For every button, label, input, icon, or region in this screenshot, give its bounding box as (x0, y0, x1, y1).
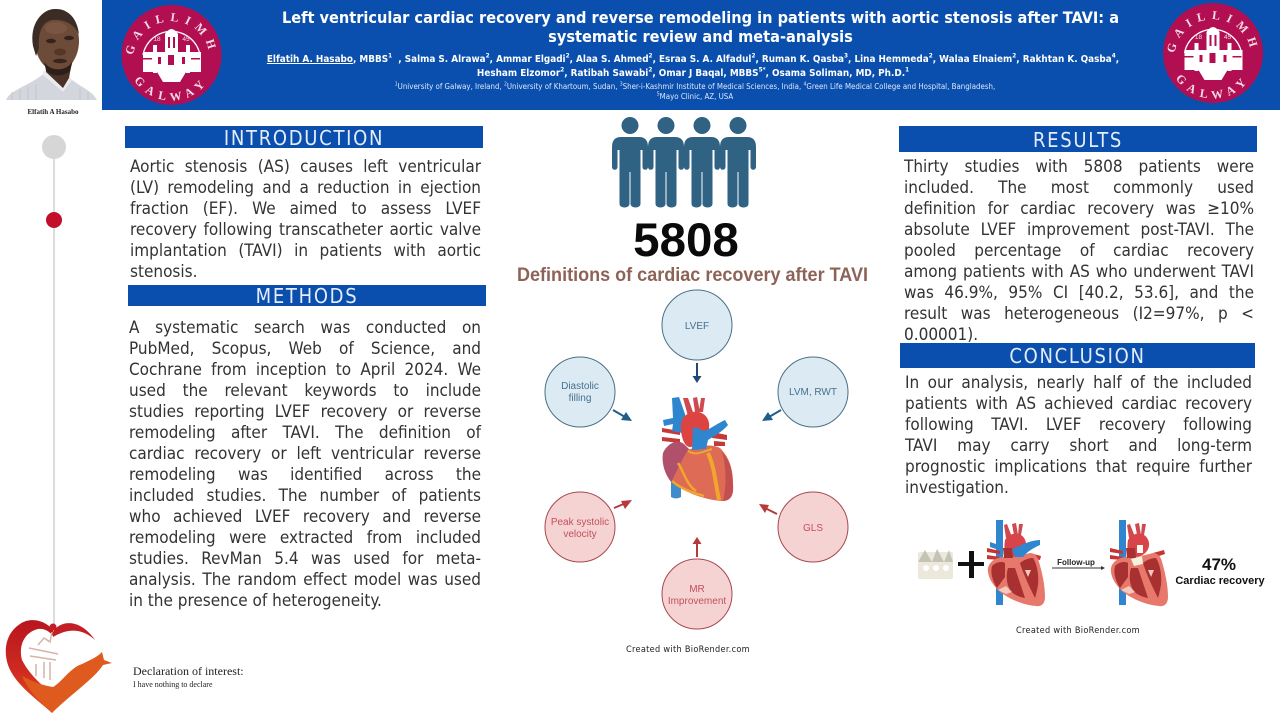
text: methods: remodeling was identified across the (129, 465, 481, 485)
text: methods: in the presence of heterogeneity. (129, 591, 382, 611)
result: 47% cardiac recovery: Cardiac recovery (1175, 575, 1266, 587)
university logo left: 18 (153, 36, 161, 43)
heading: methods (128, 285, 486, 306)
text: results (904, 157, 1254, 345)
circle: peak systolic velocity: velocity (563, 529, 597, 540)
text: introduction: (LV) remodeling and a reduction in ejection (130, 178, 481, 198)
university logo right: GALWAY (1177, 75, 1246, 99)
university logo right: 18 (1195, 34, 1202, 41)
university logo left (122, 5, 222, 105)
circle: GLS: GLS (803, 523, 823, 534)
circle: diastolic filling: Diastolic (561, 381, 599, 392)
text: results: was 46.9%, 95% CI [40.2, 53.6], and the (904, 283, 1254, 303)
text: methods: studies. RevMan 5.4 was used for meta- (129, 549, 481, 569)
patient count: 5808 (633, 214, 739, 267)
text: methods: cardiac recovery or left ventricular reverse (129, 444, 481, 464)
heading: introduction: INTRODUCTION (224, 126, 384, 150)
circle: diastolic filling (545, 357, 615, 427)
text: introduction (130, 157, 482, 282)
header band (102, 0, 1280, 110)
text: methods: Cochrane from inception to April 2024. We (129, 360, 481, 380)
circle: MR improvement: Improvement (668, 596, 726, 607)
icon: heart logo (6, 620, 112, 713)
circle: LVEF (662, 290, 732, 360)
title: Left ventricular cardiac recovery and reverse remodeling in patients with aortic stenosis after TAVI: a (282, 8, 1119, 27)
circle: LVM, RWT: LVM, RWT (789, 387, 837, 398)
definitions heading: Definitions of cardiac recovery after TAVI (517, 265, 868, 286)
text: conclusion: In our analysis, nearly half of the included (905, 373, 1252, 393)
university logo right (1163, 3, 1263, 103)
heading: conclusion (900, 343, 1255, 368)
text: conclusion: TAVI may carry short and long-term (905, 436, 1252, 456)
text: conclusion: patients with AS achieved cardiac recovery (905, 394, 1252, 414)
text: introduction: stenosis. (130, 262, 197, 282)
circle: GLS (778, 492, 848, 562)
text: methods: who achieved LVEF recovery and reverse (129, 507, 481, 527)
heading: methods: METHODS (256, 284, 358, 308)
text: introduction: implantation (TAVI) in patients with aortic (130, 241, 481, 261)
timeline (42, 135, 66, 625)
heading: results: RESULTS (1033, 128, 1123, 152)
icon: heart before TAVI (987, 520, 1045, 606)
text: introduction: fraction (EF). We aimed to assess LVEF (130, 199, 481, 219)
text: methods: remodeling were extracted from included (129, 528, 481, 548)
text: introduction: recovery following transcatheter aortic valve (130, 220, 481, 240)
text: results: included. The most commonly used (904, 178, 1254, 198)
authors: Elfatih A. Hasabo, MBBS1 , Salma S. Alrawa2, Ammar Elgadi2, Alaa S. Ahmed2, Esraa S. A. Alfadul2, Ruman K. Qasba3, Lina Hemmeda2, Walaa Elnaiem2, Rakhtan K. Qasba4, (267, 52, 1119, 65)
text: methods: analysis. The random effect model was used (129, 570, 481, 590)
heading: conclusion: CONCLUSION (1009, 344, 1146, 368)
text: conclusion: prognostic implications that require further (905, 457, 1252, 477)
text: results: absolute LVEF improvement post-TAVI. The (904, 220, 1254, 240)
heading: results (899, 126, 1257, 152)
declaration of interest: I have nothing to declare (133, 680, 213, 689)
arrow: follow-up (1052, 558, 1105, 570)
affiliations: 1University of Galway, Ireland, 2University of Khartoum, Sudan, 3Sher-i-Kashmir Institute of Medical Sciences, India, 4Green Life Medical College and Hospital, Bangladesh, (395, 81, 995, 91)
circle: LVEF: LVEF (685, 321, 709, 332)
title (282, 8, 1119, 46)
text: conclusion: investigation. (905, 478, 1009, 498)
circle: MR improvement (662, 559, 732, 629)
presenter photo (6, 9, 97, 100)
icon: heart after TAVI (1110, 520, 1168, 606)
circle: LVM, RWT (778, 357, 848, 427)
text: methods: studies reporting LVEF recovery or reverse (129, 402, 481, 422)
heading: introduction (125, 126, 483, 148)
text: results: Thirty studies with 5808 patients were (904, 157, 1254, 177)
university logo left: 45 (182, 36, 190, 43)
arrow: follow-up: Follow-up (1057, 558, 1095, 567)
text: results: definition for cardiac recovery was ≥10% (904, 199, 1254, 219)
icon: anatomical heart (662, 397, 733, 501)
circle: peak systolic velocity: Peak systolic (551, 517, 609, 528)
text: results: 0.00001). (904, 325, 978, 345)
photo caption: Elfatih A Hasabo (28, 108, 79, 116)
text: methods: A systematic search was conducted on (129, 318, 481, 338)
declaration of interest: Declaration of interest: (133, 664, 244, 678)
text: created with BioRender (centre): Created with BioRender.com (626, 645, 750, 655)
icon: four people (612, 117, 756, 208)
text: methods: PubMed, Scopus, Web of Science, and (129, 339, 481, 359)
university logo left: GAILLIMH (126, 13, 216, 54)
icon: plus sign (958, 551, 984, 578)
university logo right: GAILLIMH (1168, 11, 1258, 52)
text: results: among patients with AS who underwent TAVI (904, 262, 1254, 282)
result: 47% cardiac recovery (1175, 555, 1266, 587)
result: 47% cardiac recovery: 47% (1202, 555, 1236, 574)
circle: diastolic filling: filling (569, 393, 591, 404)
circle: MR improvement: MR (689, 584, 705, 595)
university logo left: GALWAY (136, 77, 204, 101)
affiliations (395, 81, 995, 101)
text: introduction: Aortic stenosis (AS) causes left ventricular (130, 157, 481, 177)
text: methods: remodeling after TAVI. The definition of (129, 423, 481, 443)
title: systematic review and meta-analysis (548, 27, 853, 46)
text: methods: included studies. The number of patients (129, 486, 481, 506)
circle: peak systolic velocity (545, 492, 615, 562)
affiliations: 5Mayo Clinic, AZ, USA (657, 91, 733, 101)
authors (266, 52, 1119, 79)
arrows toward heart (613, 363, 781, 557)
text: methods: used the relevant keywords to include (129, 381, 481, 401)
text: results: pooled percentage of cardiac recovery (904, 241, 1254, 261)
icon: transcatheter valve (918, 549, 953, 579)
text: conclusion (904, 373, 1252, 498)
authors: Hesham Elzomor2, Ratibah Sawabi2, Omar J Baqal, MBBS5*, Osama Soliman, MD, Ph.D.1 (477, 66, 909, 79)
text: conclusion: following TAVI. LVEF recovery following (905, 415, 1252, 435)
text: results: result was heterogeneous (I2=97%, p < (904, 304, 1254, 324)
declaration of interest (133, 664, 244, 689)
university logo right: 45 (1224, 34, 1231, 41)
text: created with BioRender (right): Created with BioRender.com (1016, 626, 1140, 636)
text: methods (129, 318, 482, 611)
